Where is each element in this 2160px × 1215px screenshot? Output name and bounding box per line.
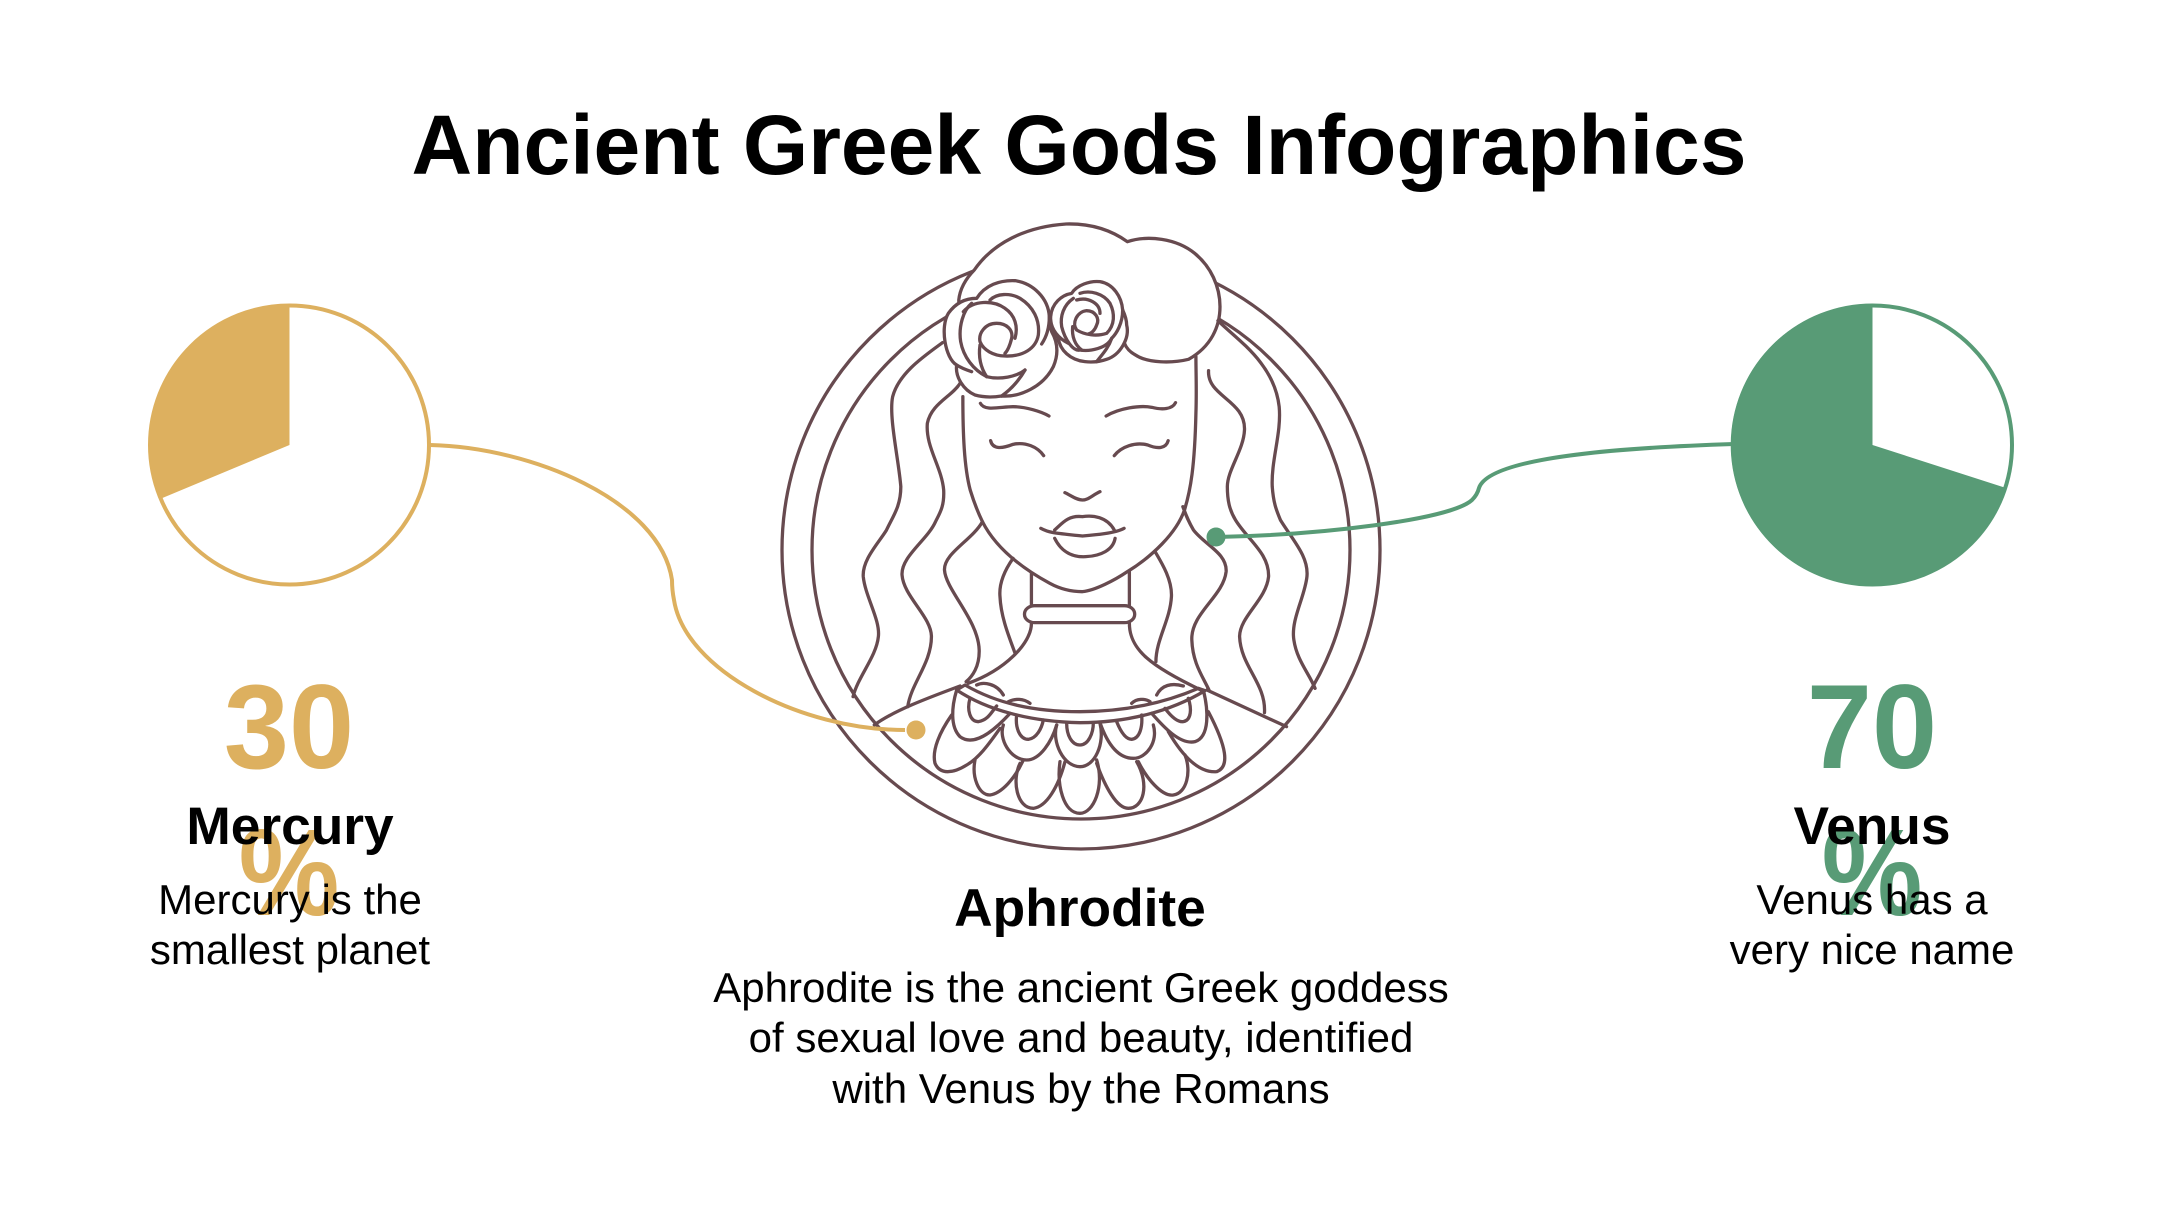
value: 30% (224, 661, 354, 942)
icon: Aphrodite portrait (782, 224, 1380, 849)
choker (1024, 606, 1135, 623)
small rose (1051, 282, 1127, 362)
heading: Aphrodite: Aphrodite (954, 879, 1206, 938)
heading: Venus: Venus (1793, 797, 1951, 856)
value: 30%: 30 (224, 661, 354, 794)
feather necklace (934, 683, 1225, 813)
panel: Mercury stat (150, 661, 430, 973)
neck and shoulders (874, 572, 1287, 727)
text: Aphrodite description: with Venus by the Romans (831, 1065, 1330, 1112)
title: Ancient Greek Gods Infographics (412, 98, 1746, 192)
portrait line art (853, 224, 1315, 727)
large rose (944, 281, 1057, 397)
arrow: green connector from Venus chart to portrait (1206, 444, 1734, 546)
nose (1065, 492, 1100, 500)
pie chart: Mercury 30% (149, 304, 429, 584)
text: Mercury description: Mercury is the (158, 876, 422, 923)
text: Aphrodite description: of sexual love and beauty, identified (749, 1014, 1413, 1061)
hair bun (959, 224, 1220, 362)
panel: Venus stat (1730, 661, 2014, 973)
flowing hair strands (853, 321, 1315, 713)
value: 70% (1807, 661, 1937, 942)
panel: Aphrodite description (713, 879, 1449, 1112)
text: Aphrodite description: Aphrodite is the ancient Greek goddess (713, 964, 1449, 1011)
eyebrows and closed eyes (980, 403, 1176, 456)
text: Venus description (1730, 876, 2014, 973)
heading: Mercury: Mercury (186, 797, 394, 856)
text: Mercury description: smallest planet (150, 926, 430, 973)
face outline (963, 357, 1196, 592)
text: Venus description: very nice name (1730, 926, 2014, 973)
value: 30%: % (239, 805, 339, 942)
text: Aphrodite description (713, 964, 1449, 1112)
arrow: gold connector from Mercury chart to portrait (430, 445, 926, 740)
pie chart: Venus 70% (1731, 304, 2012, 586)
text: Venus description: Venus has a (1756, 876, 1988, 923)
value: 70%: % (1822, 805, 1922, 942)
value: 70%: 70 (1807, 661, 1937, 794)
text: Mercury description (150, 876, 430, 973)
lips (1041, 516, 1124, 557)
portrait frame rings (782, 251, 1380, 849)
